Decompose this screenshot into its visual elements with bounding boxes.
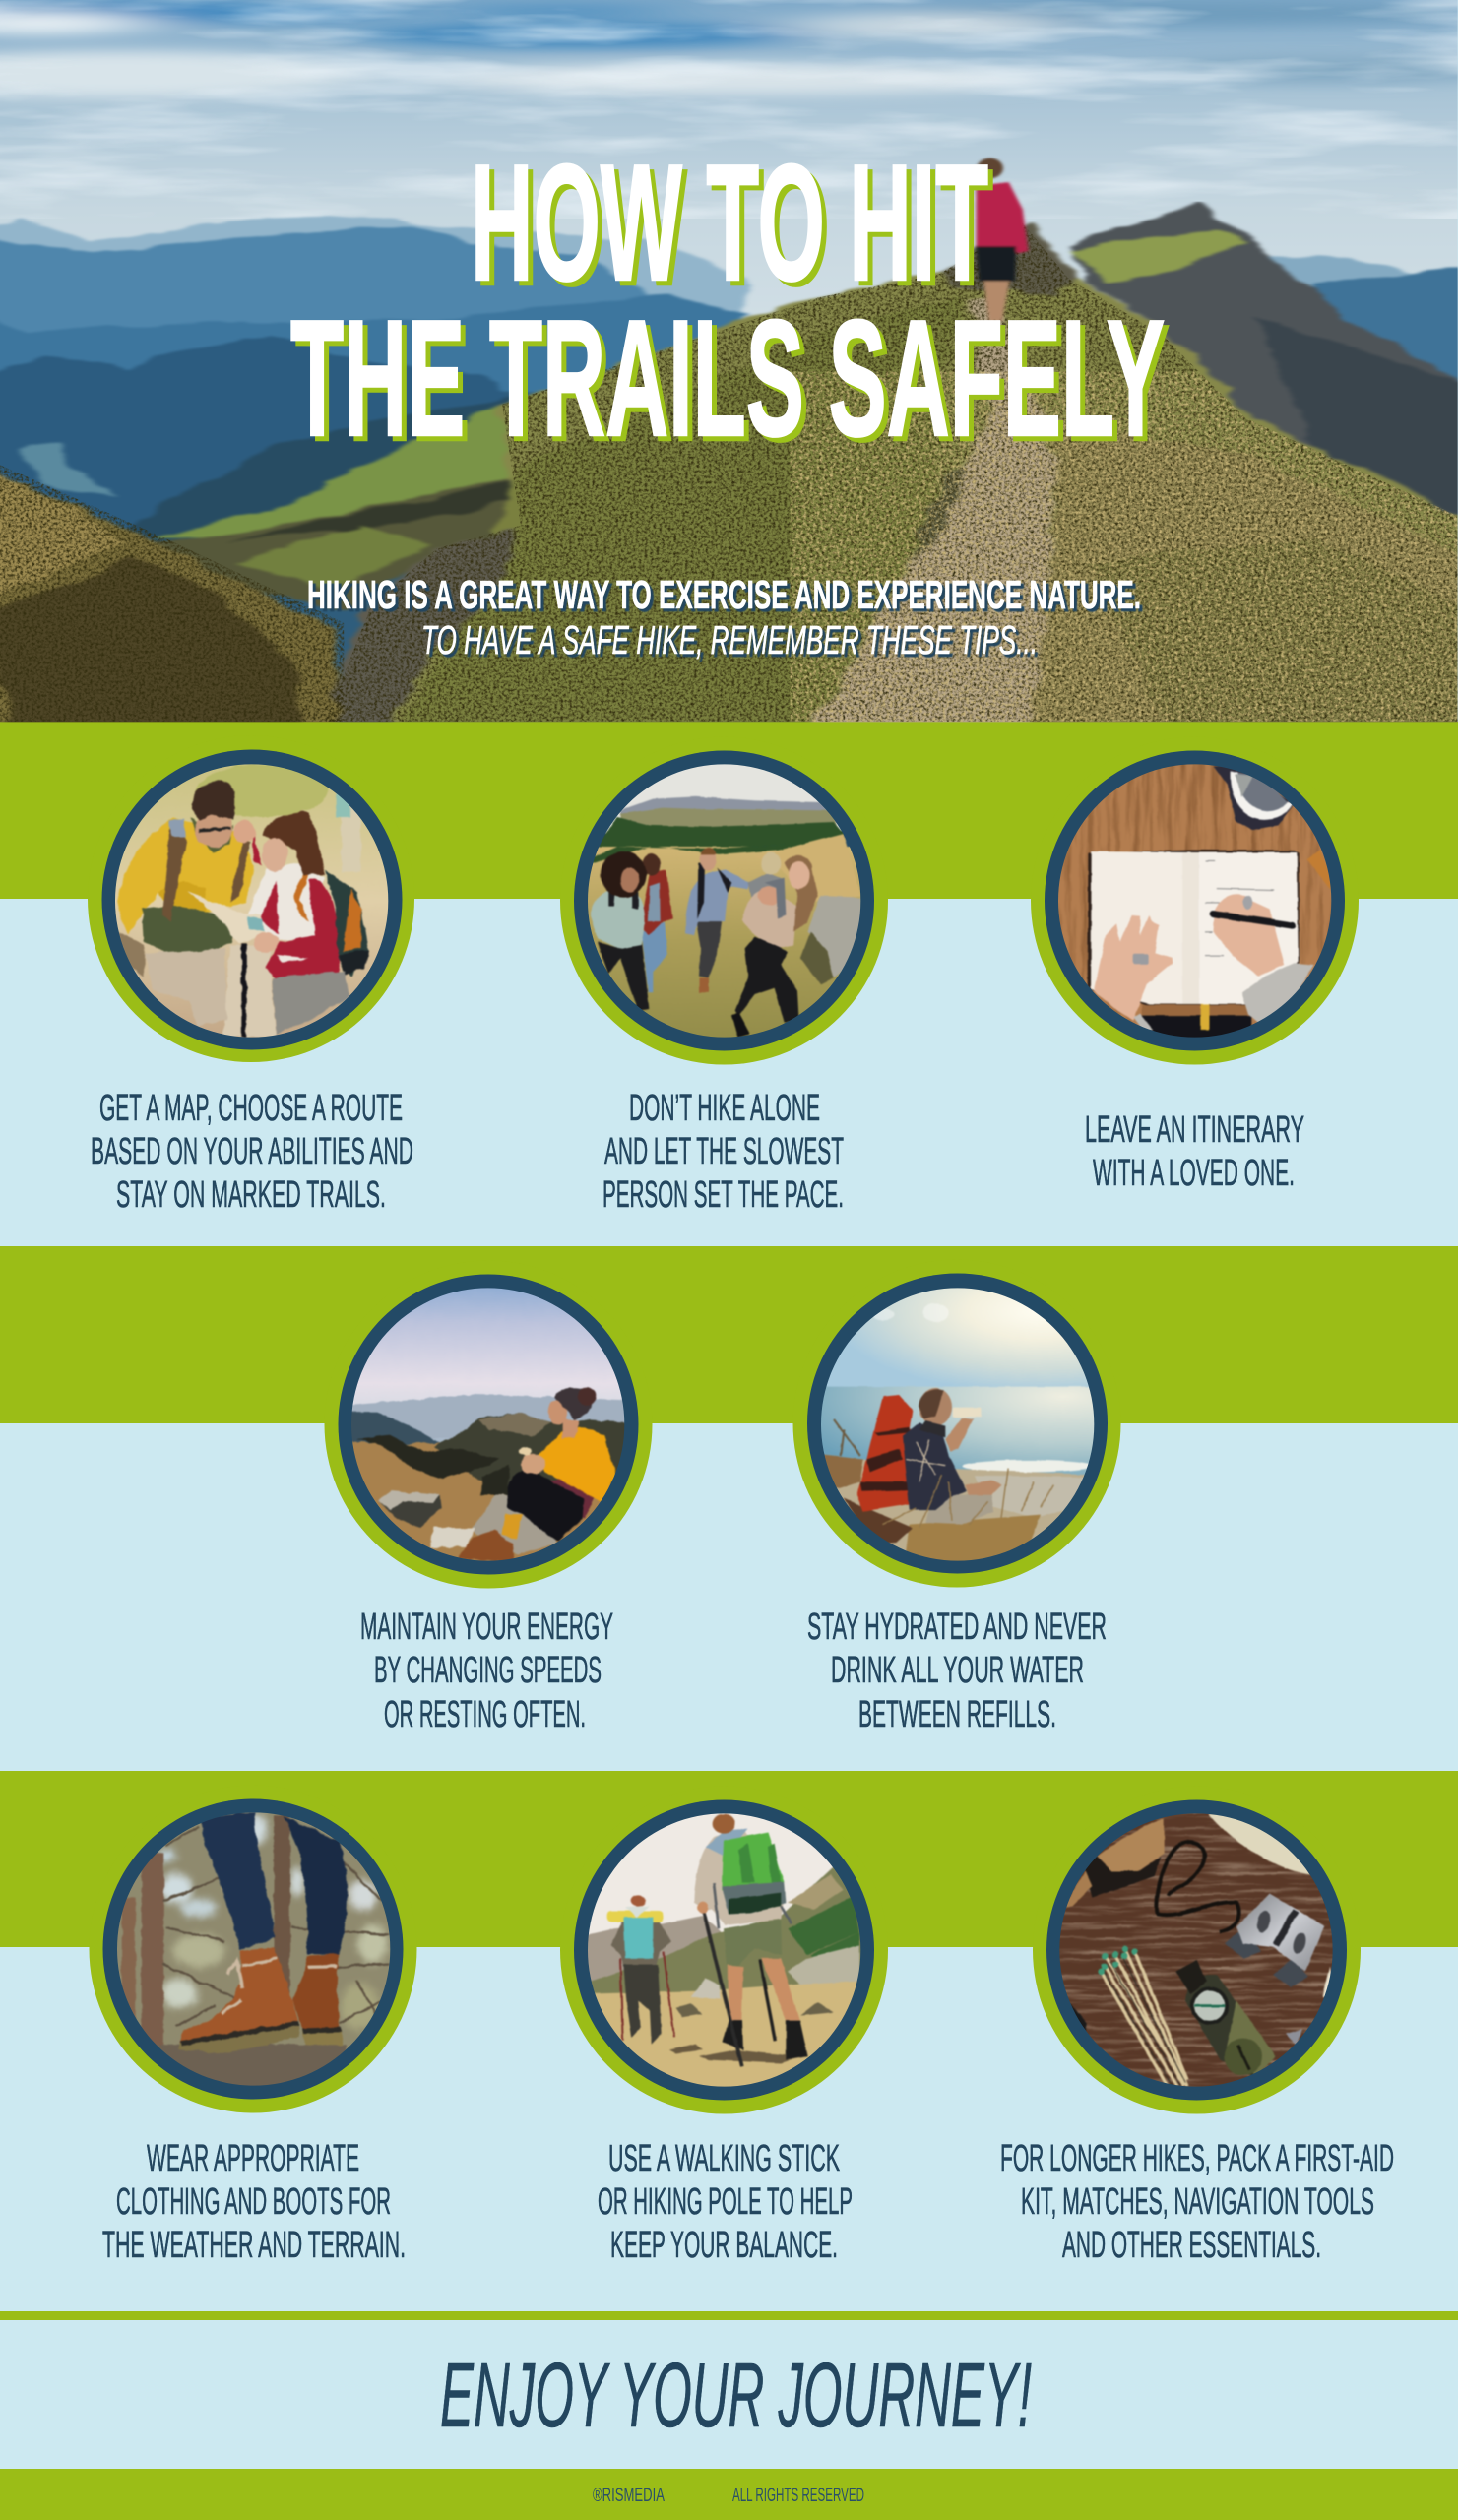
circle frame — [1033, 1786, 1361, 2114]
subtitle: TO HAVE A SAFE HIKE, REMEMBER THESE TIPS... — [421, 617, 1038, 662]
footer credits: ®RISMEDIA — [593, 2486, 665, 2506]
tip text — [807, 1606, 1107, 1735]
footer credits — [593, 2486, 864, 2506]
circle frame — [89, 1786, 417, 2112]
panel: tip 4 energy — [325, 1260, 652, 1735]
tip text: CLOTHING AND BOOTS FOR — [116, 2181, 391, 2223]
circle frame — [325, 1260, 652, 1589]
photo: woman resting on a mountain — [351, 1288, 624, 1561]
photo: hiker drinking by the sea — [821, 1288, 1095, 1561]
tip text: KEEP YOUR BALANCE. — [610, 2225, 838, 2266]
title — [290, 130, 1165, 471]
circle frame — [793, 1260, 1120, 1587]
tip text: BETWEEN REFILLS. — [858, 1694, 1056, 1735]
photo: two hikers with poles — [588, 1813, 860, 2087]
panel: tip 3 itinerary — [1031, 736, 1359, 1194]
photo: writing in a notebook — [1058, 764, 1331, 1038]
subtitle — [307, 572, 1141, 662]
panel: tip 2 don't hike alone — [560, 736, 888, 1216]
tip text: BY CHANGING SPEEDS — [374, 1650, 602, 1691]
panel: tip 6 boots — [89, 1786, 417, 2266]
panel: tip 8 first-aid essentials — [1000, 1786, 1394, 2266]
tip text: USE A WALKING STICK — [608, 2138, 840, 2179]
tip text: STAY ON MARKED TRAILS. — [116, 1174, 386, 1216]
tip text: DON’T HIKE ALONE — [629, 1088, 820, 1129]
footer credits: ALL RIGHTS RESERVED — [732, 2486, 864, 2506]
tip text: THE WEATHER AND TERRAIN. — [102, 2225, 406, 2266]
title: HOW TO HIT — [471, 130, 988, 315]
tip text: STAY HYDRATED AND NEVER — [807, 1606, 1107, 1648]
tip text: OR HIKING POLE TO HELP — [598, 2181, 853, 2223]
tip text: OR RESTING OFTEN. — [384, 1694, 586, 1735]
panel: tip 1 map — [88, 735, 414, 1216]
photo: group of hikers — [588, 764, 860, 1038]
tip text: GET A MAP, CHOOSE A ROUTE — [99, 1088, 403, 1129]
tip text — [1000, 2138, 1394, 2266]
panel: tip 5 hydrate — [793, 1260, 1120, 1735]
tip text: PERSON SET THE PACE. — [602, 1174, 844, 1216]
tip text — [91, 1088, 413, 1216]
tip text — [360, 1606, 613, 1735]
tip text — [1085, 1109, 1304, 1194]
tip text: DRINK ALL YOUR WATER — [831, 1650, 1084, 1691]
circle frame — [560, 736, 888, 1065]
tip text: WITH A LOVED ONE. — [1093, 1153, 1295, 1194]
tip text: MAINTAIN YOUR ENERGY — [360, 1606, 613, 1648]
tip text: WEAR APPROPRIATE — [147, 2138, 359, 2179]
tip text: BASED ON YOUR ABILITIES AND — [91, 1131, 413, 1172]
tip text: AND LET THE SLOWEST — [604, 1131, 844, 1172]
circle frame — [88, 735, 414, 1062]
circle frame — [560, 1786, 888, 2114]
photo: hikers reading a map — [115, 764, 388, 1038]
tip text — [102, 2138, 406, 2266]
panel: tip 7 walking stick — [560, 1786, 888, 2266]
photo: hiking boots in forest — [117, 1812, 390, 2086]
circle frame — [1031, 736, 1359, 1065]
hiker on the ridge — [977, 158, 1028, 321]
tip text — [598, 2138, 853, 2266]
panel: hero mountain photo — [0, 0, 1458, 742]
tip text — [602, 1088, 844, 1216]
photo: matches compass binoculars on wood — [1059, 1813, 1333, 2087]
